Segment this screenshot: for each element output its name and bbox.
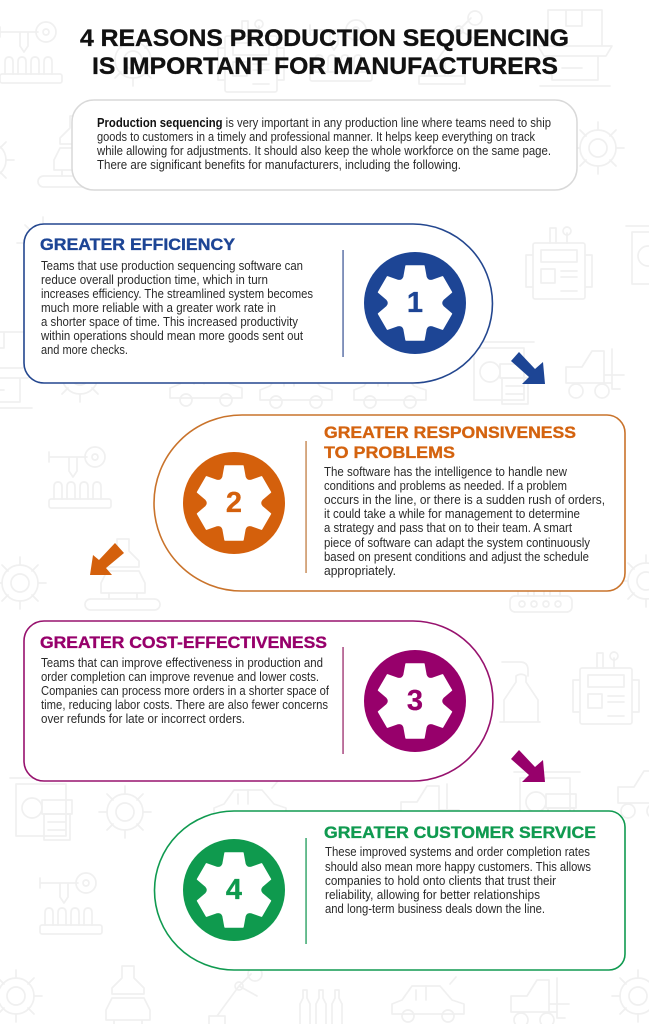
title: IS IMPORTANT FOR MANUFACTURERS <box>92 53 558 80</box>
body text: appropriately. <box>324 564 396 578</box>
heading: greater responsiveness to problems: TO PROBLEMS <box>324 443 455 462</box>
body text: Teams that can improve effectiveness in production and <box>41 656 323 670</box>
body text: within operations should mean more goods sent out <box>40 329 303 343</box>
body text: based on present conditions and adjust the schedule <box>324 550 589 564</box>
heading: greater responsiveness to problems <box>324 423 576 462</box>
body text: time, reducing labor costs. There are also fewer concerns <box>41 698 328 712</box>
icon: gear number 1: 1 <box>407 287 423 319</box>
title <box>80 25 569 80</box>
body text: increases efficiency. The streamlined system becomes <box>41 287 313 301</box>
heading: greater efficiency: GREATER EFFICIENCY <box>40 235 236 254</box>
body text: reduce overall production time, which in turn <box>41 273 268 287</box>
icon: gear number 2 <box>183 452 285 554</box>
body text <box>324 465 605 578</box>
body text <box>40 259 313 357</box>
body text <box>325 845 591 916</box>
icon: gear number 3 <box>364 650 466 752</box>
intro text: while allowing for adjustments. It should also keep the whole workforce on the same page. <box>96 144 551 158</box>
icon: gear number 2: 2 <box>226 487 242 519</box>
body text: over refunds for late or incorrect orders. <box>41 712 245 726</box>
arrow: orange down left <box>90 543 124 575</box>
body text: much more reliable with a greater work rate in <box>41 301 276 315</box>
title: 4 REASONS PRODUCTION SEQUENCING <box>80 25 569 52</box>
arrow: blue down right <box>511 352 545 384</box>
body text: piece of software can adapt the system continuously <box>324 536 591 550</box>
icon: gear number 4 <box>183 839 285 941</box>
intro text: Production sequencing is very important in any production line where teams need to ship <box>97 116 551 130</box>
body text: companies to hold onto clients that trust their <box>325 874 556 888</box>
body text: conditions and problems as needed. If a problem <box>324 479 567 493</box>
body text: Teams that use production sequencing software can <box>41 259 303 273</box>
icon: gear number 4: 4 <box>226 874 242 906</box>
body text: order completion can improve revenue and lower costs. <box>41 670 319 684</box>
body text: occurs in the line, or there is a sudden rush of orders, <box>324 493 605 507</box>
panel: introduction <box>72 100 577 190</box>
panel: greater customer service <box>154 811 625 970</box>
panel: greater efficiency <box>24 224 492 383</box>
body text: and long-term business deals down the line. <box>325 902 545 916</box>
heading: greater customer service: GREATER CUSTOMER SERVICE <box>324 823 596 842</box>
intro text <box>96 116 551 172</box>
panel: greater responsiveness to problems <box>154 415 625 591</box>
body text: These improved systems and order completion rates <box>325 845 590 859</box>
body text: a shorter space of time. This increased productivity <box>41 315 299 329</box>
intro text: goods to customers in a timely and professional manner. It helps keep everything on track <box>97 130 536 144</box>
body text: and more checks. <box>41 343 128 357</box>
icon: gear number 1 <box>364 252 466 354</box>
body text <box>41 656 329 726</box>
intro text: There are significant benefits for manufacturers, including the following. <box>97 158 461 172</box>
body text: a strategy and pass that on to their team. A smart <box>324 521 572 535</box>
panel: greater cost-effectiveness <box>24 621 493 781</box>
heading: greater responsiveness to problems: GREATER RESPONSIVENESS <box>324 423 576 442</box>
body text: Companies can process more orders in a shorter space of <box>41 684 329 698</box>
body text: it could take a while for management to determine <box>324 507 580 521</box>
icon: gear number 3: 3 <box>407 685 423 717</box>
body text: should also mean more happy customers. This allows <box>325 860 591 874</box>
body text: The software has the intelligence to handle new <box>324 465 568 479</box>
heading: greater cost-effectiveness: GREATER COST-EFFECTIVENESS <box>40 633 327 652</box>
arrow: magenta down right <box>511 750 545 782</box>
body text: reliability, allowing for better relationships <box>325 888 540 902</box>
